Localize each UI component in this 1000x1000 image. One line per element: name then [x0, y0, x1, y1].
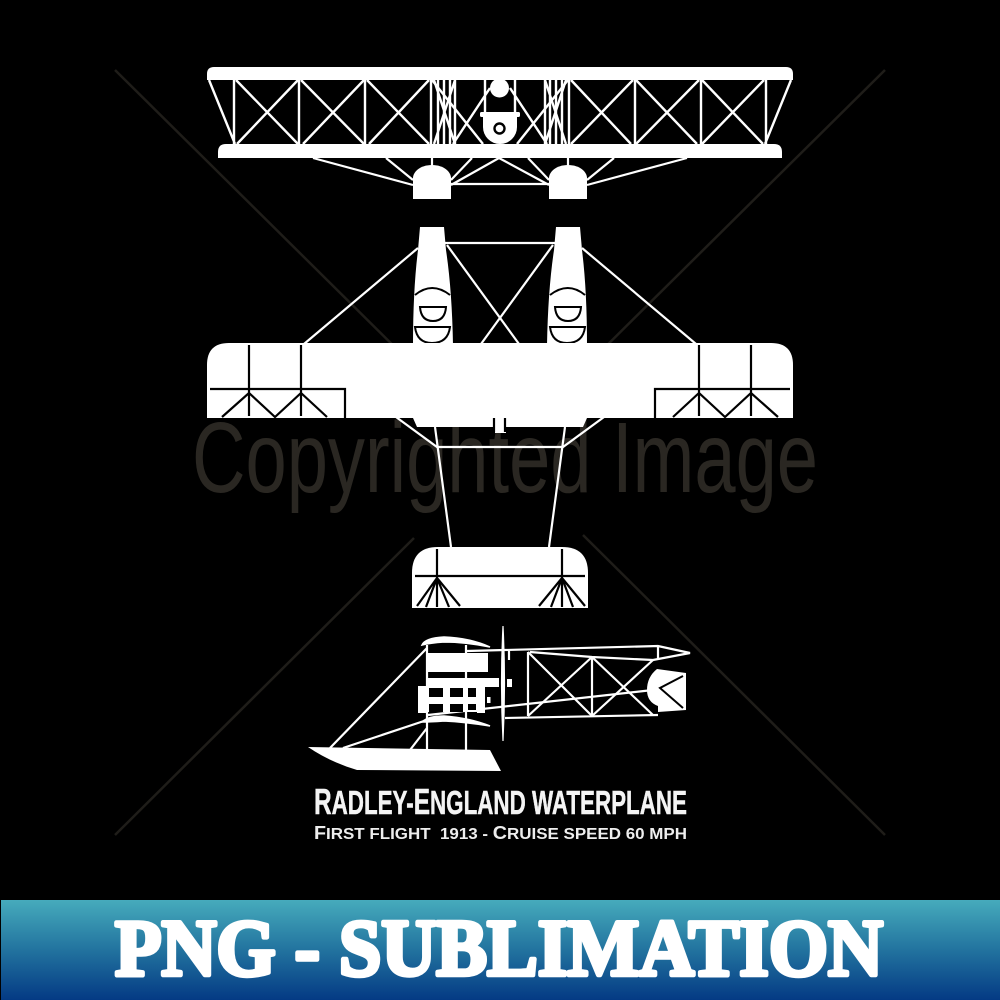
top view: main wing [207, 343, 793, 418]
side view: lower wing [422, 716, 490, 726]
side view: propeller [502, 626, 504, 741]
front view: lower bracing wires [313, 158, 687, 185]
subtitle: FIRST FLIGHT 1913 - CRUISE SPEED 60 MPH [314, 823, 687, 843]
banner [1, 900, 1000, 1000]
front view: left float nacelle [413, 165, 451, 199]
front view of aircraft [207, 67, 793, 199]
top view of aircraft [207, 227, 793, 608]
front view: interplane struts and cross bracing [209, 80, 791, 144]
front view: right float nacelle [549, 165, 587, 199]
front view: centre engine and propeller hub [480, 78, 520, 144]
side view of aircraft [308, 626, 690, 771]
side view: rigging and fuselage frame [330, 645, 690, 750]
top view: nacelle cockpit markings [415, 288, 585, 343]
front view: top wing [207, 67, 793, 80]
side view: rudder [647, 669, 686, 712]
watermark: diagonal lines [115, 70, 885, 835]
top view: right engine nacelle [547, 227, 587, 345]
side view: upper wing [422, 637, 490, 647]
top view: tail booms [396, 417, 604, 547]
banner text: PNG - SUBLIMATION [115, 905, 883, 993]
top view: tailplane [412, 547, 588, 608]
top view: left engine nacelle [413, 227, 453, 345]
side view: engine blocks [418, 653, 512, 713]
top view: wing aileron lines [210, 345, 790, 432]
title: RADLEY-ENGLAND WATERPLANE [314, 781, 687, 822]
side view: rudder chevron [660, 676, 683, 708]
top view: tailplane elevator lines [415, 549, 585, 607]
side view: float [308, 747, 501, 771]
front view: lower wing [218, 144, 782, 158]
side view: engine block cut-outs [429, 688, 476, 712]
top view: fuselage underside [413, 418, 587, 433]
top view: bracing wires [304, 243, 696, 344]
banner background [1, 900, 1000, 1000]
